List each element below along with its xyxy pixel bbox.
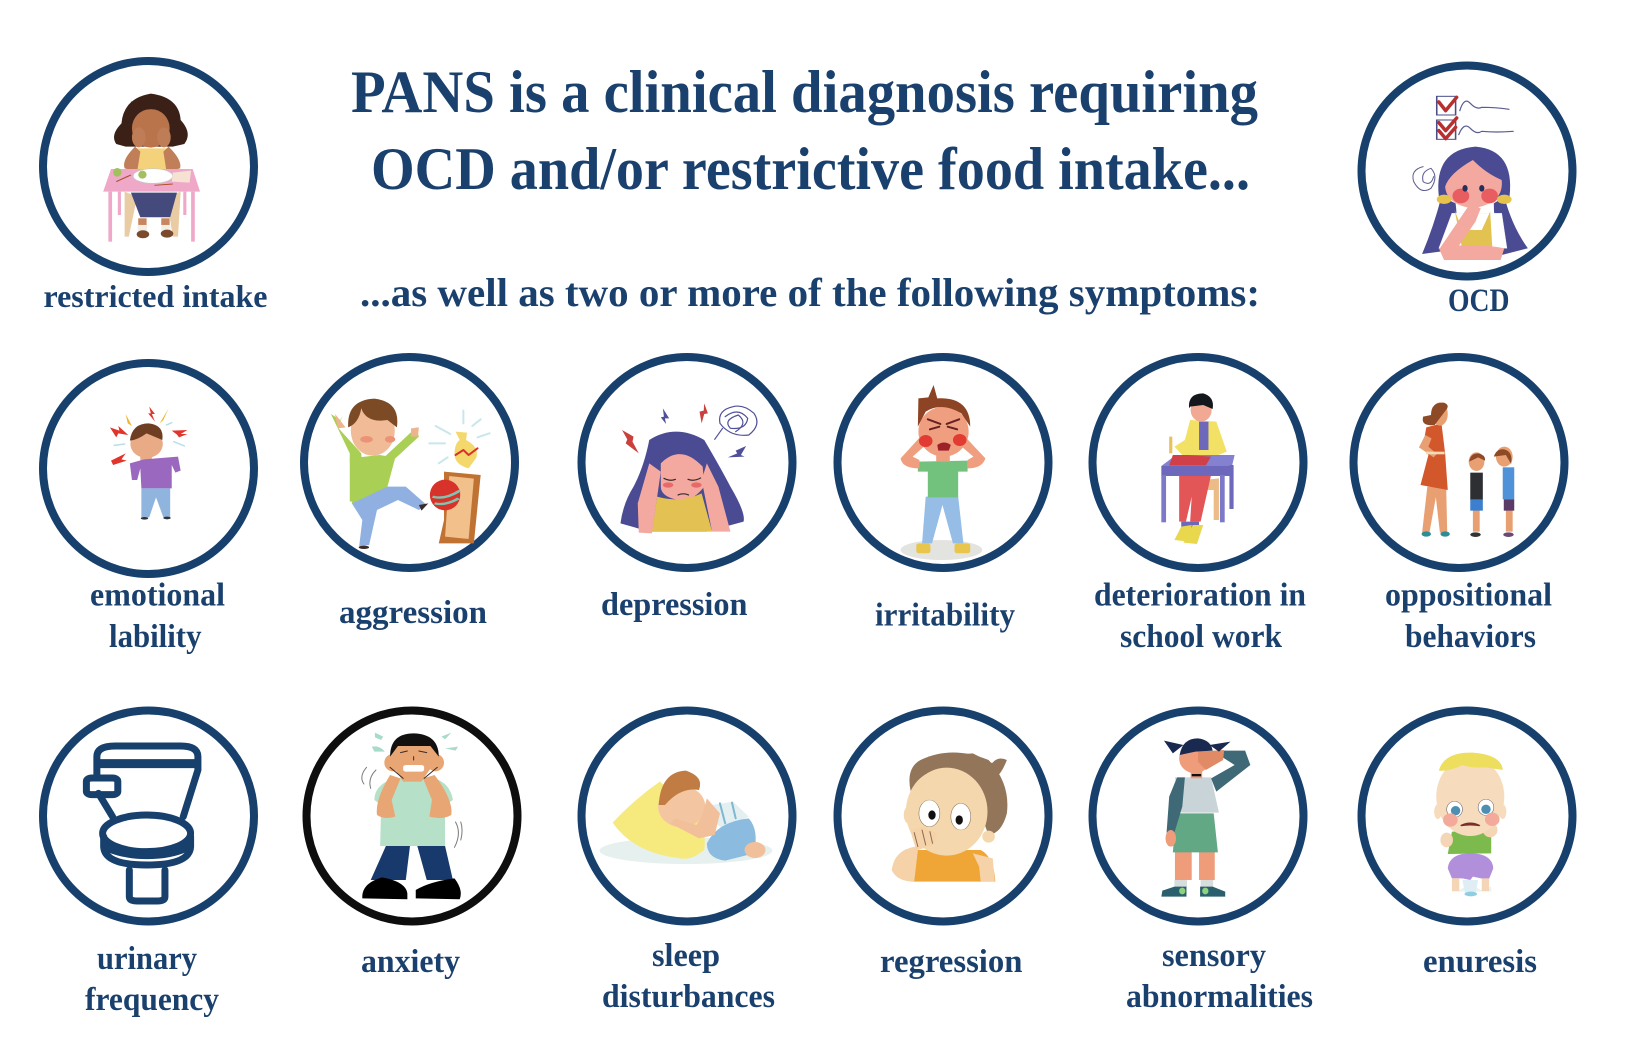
label: restricted intake: restricted intake: [44, 278, 268, 314]
label: sensory abnormalities: abnormalities: [1126, 979, 1313, 1015]
label: deterioration in school work: deterioration in: [1094, 578, 1306, 614]
label: anxiety: anxiety: [361, 944, 460, 980]
subtitle: ...as well as two or more of the following symptoms:: [360, 270, 1260, 315]
icon: toddler sucking thumb: [892, 752, 1007, 882]
panel: anxiety: [306, 710, 518, 922]
label: oppositional behaviors: [1385, 578, 1552, 655]
label: deterioration in school work: [1094, 578, 1306, 655]
panel: OCD: [1362, 66, 1572, 276]
icon: student at desk: [1161, 393, 1235, 544]
title: OCD and/or restrictive food intake...: [371, 136, 1250, 202]
icon: mother and two boys: [1419, 402, 1514, 537]
panel: regression: [838, 710, 1048, 922]
label: irritability: irritability: [875, 598, 1015, 634]
label: oppositional behaviors: oppositional: [1385, 578, 1552, 614]
label: emotional lability: emotional: [90, 578, 225, 614]
title: [351, 59, 1258, 202]
icon: angry boy: [901, 385, 985, 560]
label: aggression: aggression: [339, 595, 487, 631]
panel: urinary frequency: [43, 710, 254, 922]
icon: toilet: [86, 746, 198, 901]
icon: upset boy: [110, 407, 187, 520]
icon: boy kicking ball: [331, 399, 490, 549]
panel: restricted intake: [43, 61, 254, 272]
title: PANS is a clinical diagnosis requiring: [351, 59, 1258, 125]
label: oppositional behaviors: behaviors: [1405, 619, 1536, 655]
panel: depression: [582, 357, 792, 568]
icon: girl covering eyes: [1161, 738, 1250, 897]
label: regression: regression: [880, 944, 1022, 980]
icon: sleeping child: [600, 771, 772, 864]
label: sleep disturbances: [602, 938, 775, 1015]
icon: girl with checklist: [1413, 96, 1528, 260]
label: urinary frequency: urinary: [97, 941, 197, 977]
label: sleep disturbances: disturbances: [602, 979, 775, 1015]
label: deterioration in school work: school work: [1120, 619, 1283, 655]
panel: deterioration in school work: [1092, 357, 1304, 568]
label: depression: depression: [601, 587, 748, 623]
label: emotional lability: [90, 578, 225, 655]
label: sleep disturbances: sleep: [652, 938, 720, 974]
panel: oppositional behaviors: [1354, 357, 1564, 568]
label: urinary frequency: [85, 941, 219, 1018]
icon: girl at table: [103, 94, 200, 242]
panel: enuresis: [1362, 710, 1572, 922]
label: sensory abnormalities: sensory: [1162, 938, 1266, 974]
icon: crying baby: [1434, 753, 1506, 896]
panel: emotional lability: [43, 363, 254, 574]
panel: sleep disturbances: [582, 710, 792, 922]
icon: anxious man: [362, 733, 462, 899]
icon: sad girl: [620, 403, 757, 533]
label: enuresis: enuresis: [1423, 944, 1537, 980]
label: urinary frequency: frequency: [85, 982, 219, 1018]
panel: irritability: [838, 357, 1048, 568]
label: sensory abnormalities: [1126, 938, 1313, 1015]
panel: sensory abnormalities: [1092, 710, 1304, 922]
panel: aggression: [304, 357, 515, 568]
label: OCD: OCD: [1448, 283, 1510, 319]
label: emotional lability: lability: [109, 619, 202, 655]
